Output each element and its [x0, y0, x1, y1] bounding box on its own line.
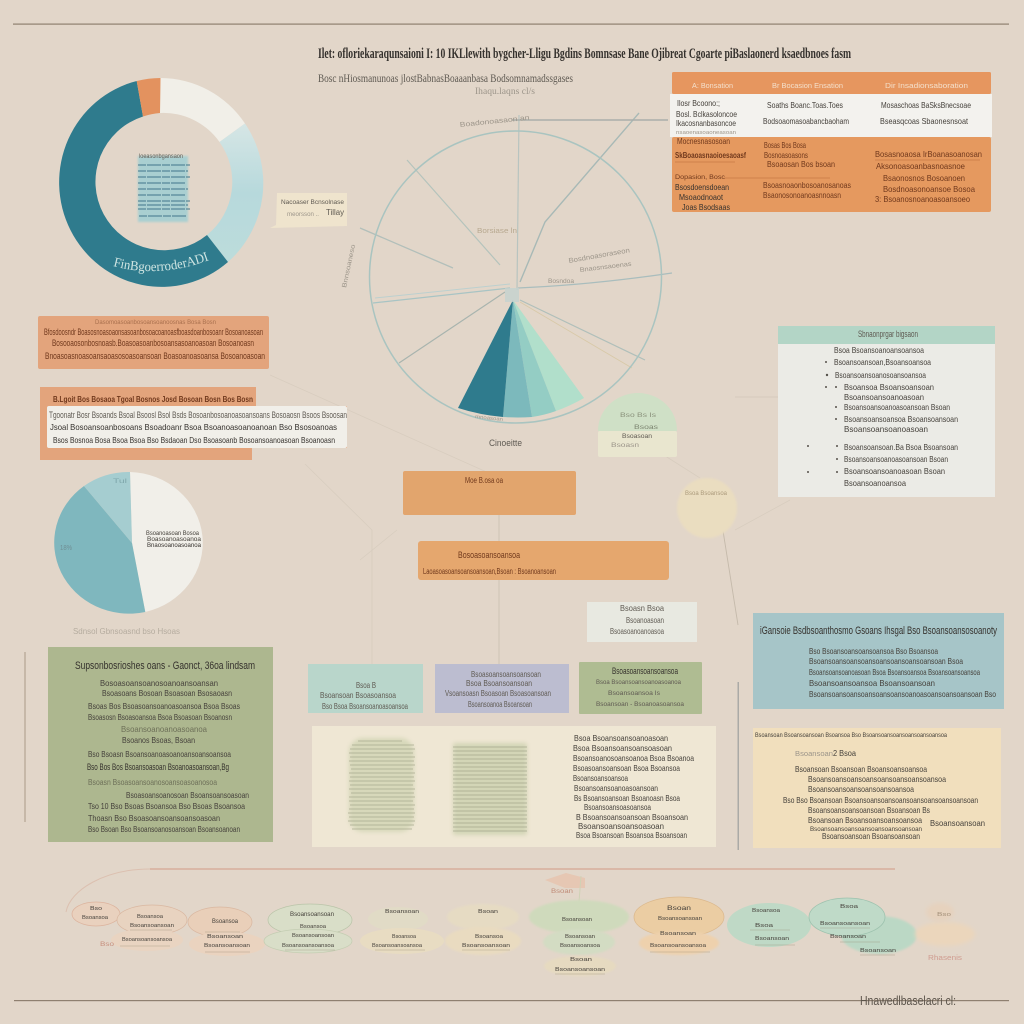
box: lavender: Vsoansoasn Bsoasoan Bsoasoansoan: [445, 688, 551, 698]
table text: Bosnoasoasons: [764, 150, 808, 160]
timeline ellipse text: Bsoansoansoansoa: [372, 943, 423, 949]
subtitle second line: Ihaqu.laqns cl/s: [475, 86, 536, 96]
table text: [675, 81, 982, 212]
diagram small labels: Bosndoa: [548, 278, 574, 285]
panel: mint header list: Bsoansoansoan.Ba Bsoa Bsoansoan: [844, 442, 958, 452]
flag marker: Bsoan: [551, 888, 573, 895]
striped block left: [348, 738, 415, 832]
pie text: Boasoanoasoanoa: [147, 536, 201, 543]
table text: Bseasqcoas Sbaonesnsoat: [880, 116, 969, 126]
donut center text block: [138, 154, 190, 222]
table text: Ikacosnanbasoncoe: [676, 118, 736, 128]
panel: orange note with white band: Bsos Bosnoa Bosa Bsoa Bsoa Bso Bsdaoan Dso Bsoasoanb Bosoansoanoasoan Bsoanoasn: [53, 435, 335, 445]
panel: green summary: Bsoasn Bsoasoansoanosoansoasoanosoa: [88, 777, 217, 787]
timeline ellipse text: Bso: [100, 942, 115, 948]
panel: cream with striped blocks: [312, 726, 716, 847]
table header: [672, 72, 991, 94]
timeline ellipse text: Bsoansoansoa: [560, 943, 601, 949]
box: lavender: Bsoasoansoansoansoan: [471, 669, 541, 679]
panel: mint header list: Bsoansoansoanoasoansoan Bsoan: [844, 402, 950, 412]
timeline ellipses: [72, 897, 975, 976]
panel: orange note with white band: [40, 387, 347, 460]
table: [670, 72, 992, 212]
timeline ellipse text: Bsoansoansoan: [204, 943, 250, 949]
central hub: [505, 288, 519, 302]
panel: peach list: Bsoansoansoansoansoansoansoa: [808, 784, 914, 794]
table text: Dir Insadionsaboration: [885, 81, 968, 90]
diagram small labels: Bosdnoasoraseon: [568, 247, 631, 265]
pie text: Bsoanoasoan Bosoa: [146, 530, 199, 537]
box: green: Bsoansoan - Bsoanoasoansoa: [596, 701, 684, 708]
timeline ellipse text: Bsoansoa: [212, 919, 239, 925]
pie text: 18%: [60, 543, 72, 552]
table text: Br Bocasion Ensation: [772, 81, 843, 90]
bottom rule: [14, 1000, 1009, 1001]
diagram small labels: Cinoeitte: [489, 438, 522, 448]
teal slice: [54, 486, 145, 614]
panel: peach list: 2 Bsoa: [833, 749, 857, 758]
panel: mint header list: Bsoansoansoan,Bsoansoansoa: [834, 357, 931, 367]
dome badge: Bsoasn: [611, 442, 639, 449]
panel: mint header list: Bsoansoa Bsoansoansoan: [844, 382, 934, 392]
subtitle: Bosc nHiosmanunoas jlostBabnasBoaaanbasa Bodsomnamadssgases: [318, 71, 573, 85]
table text: Bsaonosnos Bosoanoen: [883, 173, 965, 183]
diagram small labels: mnoasoan: [475, 414, 504, 423]
table text: Ilosr Bcoono:;: [677, 98, 720, 108]
timeline ellipse text: Bsoansoa: [300, 924, 327, 930]
timeline ellipse text: Bsoansoansoansoa: [650, 943, 707, 949]
striped block right: [453, 743, 527, 835]
panel: orange note: [38, 316, 269, 369]
panel: mint header list: Sbnaonprgar bigsaon: [858, 329, 918, 339]
panel: orange note: Bosooaosonbosnoasb.Boasoasoanbosoansasoanoasoan Bosoanoasn: [52, 338, 254, 348]
panel: peach list: Bsoansoan: [795, 751, 833, 758]
timeline ellipse text: Bsoan: [478, 909, 498, 915]
tan circle badge: Bsoa Bsoansoa: [685, 490, 727, 497]
panel: peach list: Bsoansoansoansoansoansoansoansoan: [810, 827, 922, 833]
table text: Mocnesnasosoan: [677, 136, 730, 146]
right vertical rule: [738, 682, 739, 850]
box: green: Bsoa Bsoansoansoanoasoanoa: [596, 679, 681, 686]
diagram small labels: Bnaosnsaoenas: [579, 261, 633, 274]
diagram small labels: Boadonoasaon an: [459, 115, 530, 129]
pie wedge: [458, 300, 584, 418]
table text: Bsaonosonoanoasnnoasn: [763, 190, 841, 200]
panel: green summary: Bsoansoanoanoasoanoa: [121, 724, 207, 734]
panel: green summary: Bsoas Bos Bsoasoansoanoasoansoa Bsoa Bsoas: [88, 701, 240, 711]
panel: mint header list: Bsoansoansoanoasoan: [844, 392, 924, 402]
timeline ellipse text: Bsoansoansoansoa: [122, 937, 172, 943]
cream panel text: Bsoansoansoansoa: [573, 773, 628, 783]
panel: orange note: Dasomoasoanbosoansoanoosnas Bosa Bosn: [95, 319, 216, 326]
left vertical rule: [24, 652, 26, 822]
timeline ellipse text: [82, 904, 963, 973]
panel: green summary: Bsoanos Bsoas, Bsoan: [122, 735, 195, 745]
panel: mint header list: [778, 326, 995, 497]
panel: mint header list: Bsoansoansoanoasoan Bsoan: [844, 466, 945, 476]
timeline ellipse text: Bsoan: [667, 906, 691, 912]
panel: orange note: Bfosdoosndr Boasosnoasoaonsasoanbosoacoanoasfboasdoanbosoanr Bosoanoasoan: [44, 327, 263, 337]
connector lines: [270, 113, 790, 665]
cream panel text: Bsoansoansoansoasoan: [578, 821, 664, 831]
table text: Msoaodnoaot: [679, 192, 724, 202]
panel: blue info: Bso Bsoansoansoansoansoa Bso Bsoansoa: [809, 646, 938, 656]
diagram small labels: Bnnsoaneso: [341, 243, 357, 288]
pie text: Bnaosoanoasoanoa: [147, 542, 201, 549]
cream panel text: Bsoa Bsoansoansoanoasoan: [574, 733, 668, 743]
timeline ellipse text: Bsoansoa: [475, 934, 504, 940]
box: green: [579, 662, 702, 714]
table orange row: [672, 137, 991, 212]
pie caption: Sdnsol Gbnsoasnd bso Hsoas: [73, 627, 180, 636]
panel: orange note with white band: Tgoonatr Bosr Bsoands Bsoal Bsoosl Bsol Bsds Bosoanbosoanoasoansoans Bosoaosn Bsoos Bsoosan: [49, 410, 347, 420]
box: orange second label: Laoasoasoansoansoansoan,Bsoan : Bsoanoansoan: [423, 567, 556, 576]
timeline ellipse text: Bsoansoansoan: [290, 912, 334, 918]
panel: mint header list: Bsoansoansoansoa Bsoansoansoan: [844, 414, 958, 424]
timeline line: [66, 869, 895, 912]
box: orange second label: Bosoasoansoansoa: [458, 550, 521, 561]
table white row: [670, 94, 992, 137]
timeline ellipse text: Bsoansoan: [565, 934, 595, 940]
white segment: [160, 78, 245, 142]
panel: mint header list: Bsoansoansoanoasoan: [844, 424, 928, 434]
timeline ellipse text: Bsoansoansoan: [820, 921, 870, 927]
timeline ellipse text: Bsoansoa: [392, 934, 417, 940]
pie text: [60, 479, 201, 552]
box: mint: Bso Bsoa Bsoansoanoasoansoa: [322, 701, 408, 711]
timeline ellipse text: Bsoansoansoan: [658, 916, 702, 922]
cream panel text: Bs Bsoansoansoan Bsoanoasn Bsoa: [574, 793, 680, 803]
footer text: Hnawedlbaselacri cl:: [860, 993, 956, 1008]
tan circle badge: [677, 478, 737, 538]
timeline ellipse text: Bso: [90, 906, 102, 912]
box: lavender: Bsoansoanoa Bsoansoan: [468, 699, 532, 709]
timeline ellipse text: Bsoan: [570, 957, 592, 963]
timeline ellipse text: Bso: [937, 912, 951, 918]
donut chart: [59, 78, 264, 287]
timeline ellipse text: Bsoansoansoan: [555, 967, 605, 973]
panel: peach list: Bsoansoansoan Bsoansoansoan: [822, 831, 920, 841]
table text: Soaths Boanc.Toas.Toes: [767, 100, 843, 110]
panel: green summary: Bsoasosn Bsoasoansoa Bsoa Bsoasoan Bsoanosn: [88, 712, 232, 722]
panel: green summary: Bso Bsoan Bso Bsoansoanosoansoan Bsoansoanoan: [88, 824, 240, 834]
diagram small labels: Borsiase ln: [477, 228, 517, 235]
panel: peach list: Bsoansoan Bsoansoansoan Bsoansoa Bso Bsoansoansoansoansoansoansoa: [755, 732, 947, 739]
box: mint: Bsoansoan Bsoasoansoa: [320, 690, 396, 700]
panel: green summary: Bsoasoans Bosoan Bsoasoan Bsosaoasn: [102, 688, 232, 698]
panel: mint header list: Bsoa Bsoansoanoansoansoa: [834, 345, 924, 355]
panel: peach list: Bsoansoan Bsoansoan Bsoansoansoansoa: [795, 764, 927, 774]
panel: green summary: Tso 10 Bso Bsoas Bsoansoa Bso Bsoas Bsoansoa: [88, 801, 245, 811]
small pie chart: [54, 472, 203, 614]
table text: Bodsoaomasoabancbaoham: [763, 116, 849, 126]
table text: Bosdnoasonoansoe Bosoa: [883, 184, 975, 194]
cream panel text: B Bsoansoansoansoan Bsoansoan: [576, 812, 688, 822]
box: orange second label: [418, 541, 669, 580]
cream panel text: Bsoansoansoasoansoa: [584, 802, 651, 812]
panel: blue info: Bsoansoansoansoa Bsoansoansoan: [809, 678, 935, 688]
panel: callout left of circle: meorsson ..: [287, 212, 319, 218]
panel: green summary: [48, 647, 273, 842]
panel: mint header list: Bsoansoansoanoasoansoan Bsoan: [844, 454, 948, 464]
list panel body: [778, 344, 995, 497]
timeline ellipse text: Bsoa: [840, 904, 859, 910]
table text: Aksonoasoanbasnoasnoe: [876, 161, 965, 171]
cream panel text: Bsoa Bsoansoansoansoasoan: [573, 743, 672, 753]
box: small white note: [587, 602, 697, 642]
table text: Bosas Bos Bosa: [764, 140, 806, 150]
light slice: [84, 472, 132, 543]
pie text: Tul: [113, 479, 127, 485]
dome badge: Bsoasoan: [622, 433, 652, 440]
panel: callout left of circle: Tillay: [326, 208, 344, 217]
cream panel text: [573, 733, 694, 840]
dome badge: Bsoas: [634, 424, 659, 431]
outer circle: [370, 131, 662, 423]
table text: Joas Bsodsaas: [682, 202, 730, 212]
table text: nsaoenasoaoneasoan: [676, 130, 736, 136]
curved label: FinBgoerroderADI: [114, 252, 209, 274]
donut center text block: loeasonbgansaon: [139, 154, 183, 160]
top rule: [13, 24, 1009, 25]
table text: Bsosdoensdoean: [675, 182, 729, 192]
timeline ellipse text: Bsoansoansoan: [292, 933, 334, 939]
box: mint: [308, 664, 423, 713]
table text: Bosl. Bclkasoloncoe: [676, 109, 737, 119]
timeline ellipse text: Bsoansoansoansoa: [282, 943, 335, 949]
timeline ellipse text: Rhasenis: [928, 955, 963, 962]
panel: callout left of circle: Nacoaser Bcnsolnase: [281, 199, 344, 206]
panel: orange note with white band: Jsoal Bosoansoanbosoans Bsoadoanr Bsoa Bsoanoasoanoanoan Bso Bsosoanoas: [50, 422, 337, 432]
table text: 3: Bsoanosnoanoasoansoeo: [875, 194, 970, 204]
table text: Bsoasnoaonbosoanosanoas: [763, 180, 851, 190]
diagram small labels: [341, 115, 633, 448]
circle diagram: [270, 113, 790, 665]
dome badge: Bso Bs Is: [620, 412, 657, 419]
panel: blue info: Bsoansoansoansoansoansoansoansoansoan Bsoa: [809, 656, 963, 666]
box: lavender: [435, 664, 569, 713]
timeline ellipse text: Bsoansoa: [82, 915, 108, 921]
panel: peach list: Bsoansoansoansoansoansoansoansoansoa: [808, 774, 946, 784]
light blue segment: [207, 124, 263, 262]
cream panel text: Bsoasoansoansoan Bsoa Bsoansoa: [573, 763, 680, 773]
panel: mint header list: Bsoansoansoanosoansoansoa: [835, 370, 926, 380]
box: orange top label: Moe B.osa oa: [465, 476, 503, 485]
orange segment: [137, 78, 160, 116]
panel: orange note with white band: B.Lgoit Bos Bosaoa Tgoal Bosnos Josd Bosoan Bosn Bos Bosn: [53, 394, 253, 404]
panel: callout left of circle: [270, 193, 347, 228]
panel: green summary: Bso Bos Bos Bsoansoasoan Bsoanoasoansoan,Bg: [87, 762, 229, 773]
panel: green summary: Thoasn Bso Bsoasoansoansoansoasoan: [88, 813, 220, 823]
table text: Dopasion, Bosc: [675, 175, 725, 181]
panel: peach list: Bsoansoansoan: [930, 818, 985, 828]
timeline ellipse text: Bsoa: [755, 923, 774, 929]
box: small white note: Bsoasoanoanoasoa: [610, 626, 664, 636]
white band: [47, 406, 347, 448]
list panel header: [778, 326, 995, 344]
flag marker: [545, 873, 585, 915]
box: green: Bsoasoansoansoansoa: [612, 666, 678, 676]
table text: Bosasnoaosa IrBoanasoanosan: [875, 149, 982, 159]
timeline ellipse text: Bsoansoa: [137, 914, 163, 920]
timeline ellipse text: Bsoansoan: [207, 934, 243, 940]
cream panel text: Bsoansoanosoansoanoa Bsoa Bsoanoa: [573, 753, 694, 763]
table text: Bsoaosan Bos bsoan: [767, 159, 835, 169]
timeline ellipse text: Bsoansoan: [660, 931, 696, 937]
teal segment: [59, 81, 228, 287]
panel: mint header list: Bsoansoanoansoa: [844, 478, 906, 488]
panel: peach list: Bsoansoansoansoansoan Bsoansoan Bs: [808, 805, 930, 815]
timeline ellipse text: Bsoansoansoan: [130, 923, 174, 929]
panel: peach list: Bsoansoan Bsoansoansoansoansoa: [808, 815, 922, 825]
timeline ellipse text: Bsoansoan: [860, 948, 896, 954]
green panel heading: Supsonbosrioshes oans - Gaonct, 36oa lindsam: [75, 660, 255, 672]
timeline ellipse text: Bsoansoan: [385, 909, 419, 915]
table text: A: Bonsation: [692, 81, 733, 90]
panel: blue info: [753, 613, 1004, 709]
panel: peach list: [753, 728, 1001, 848]
panel: green summary: Bsoasoansoanosoan Bsoansoansoasoan: [126, 790, 249, 800]
dome badge: [598, 393, 677, 457]
panel: orange note: Bnoasoasnoasoansaoasosoasoansoan Boasoanoasoansa Bosoanoasoan: [45, 351, 265, 361]
cream panel text: Bsoa Bsoansoan Bsoansoa Bsoansoan: [576, 830, 687, 840]
timeline ellipse text: Bsoansoansoan: [462, 943, 510, 949]
timeline ellipse text: Bsoansoan: [562, 917, 592, 923]
box: small white note: Bsoasn Bsoa: [620, 603, 664, 613]
timeline ellipse text: Bsoansoan: [755, 936, 789, 942]
timeline ellipse text: Bsoansoa: [752, 908, 781, 914]
box: green: Bsoansoansoa Is: [608, 690, 661, 697]
table text: SkBoaoasnaoioesaoasf: [675, 150, 746, 160]
timeline ellipse rules: [120, 928, 895, 974]
box: lavender: Bsoa Bsoansoansoan: [466, 678, 532, 688]
panel: green summary: Bosoasoansoanosoanoansoansan: [100, 678, 218, 688]
timeline ellipse text: Bsoansoan: [830, 934, 866, 940]
table text: Mosaschoas BaSksBnecsoae: [881, 100, 971, 110]
cream panel text: Bsoansoansoanoasoansoan: [574, 783, 658, 793]
panel: green summary: Bso Bsoasn Bsoansoanoasoanoansoansoansoa: [88, 749, 231, 759]
timeline: [66, 869, 975, 976]
title block: [318, 46, 851, 96]
box: mint: Bsoa B: [356, 680, 376, 690]
box: small white note: Bsoanoasoan: [626, 615, 664, 625]
box: orange top label: [403, 471, 576, 515]
white slice: [130, 472, 203, 612]
